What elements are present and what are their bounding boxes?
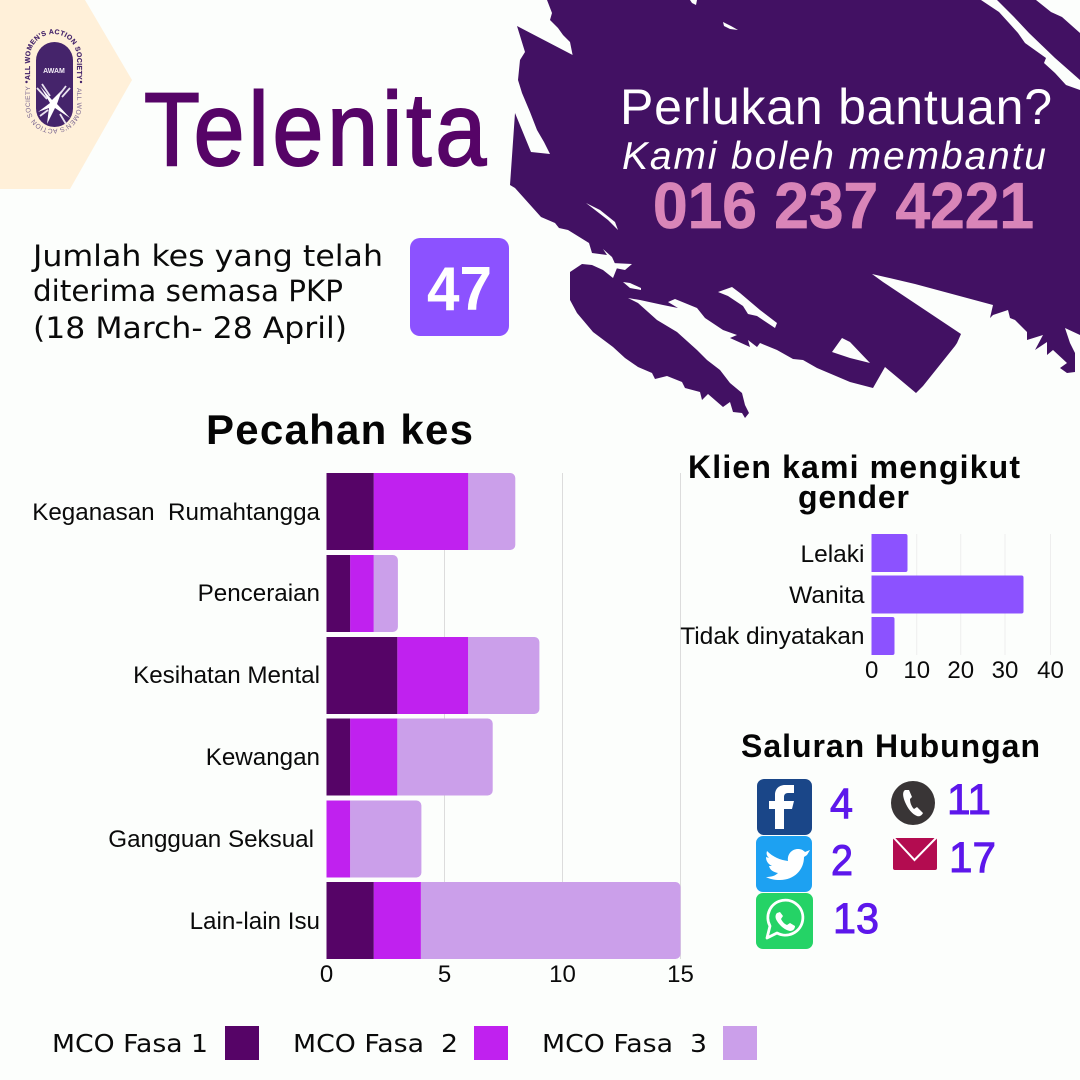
legend item: MCO Fasa 1: [52, 1026, 259, 1060]
legend item: MCO Fasa 2: [293, 1026, 508, 1060]
category labels: Gangguan Seksual: [108, 826, 314, 853]
x axis labels: 20: [947, 657, 974, 684]
category labels: Lain-lain Isu: [190, 908, 320, 935]
x axis labels: 40: [1037, 657, 1064, 684]
stacked bar chart: case breakdown: [32, 473, 694, 988]
heading: clients by gender: [688, 449, 1020, 515]
legend: [52, 1026, 757, 1060]
icon: AWAM logo: ALL WOMEN'S ACTION SOCIETY: [26, 86, 82, 134]
bar: Wanita: [872, 576, 1024, 614]
contact counts: 13: [833, 895, 879, 943]
bars: Kewangan: [326, 718, 493, 796]
title: Telenita: [144, 71, 487, 187]
icon: facebook: [757, 779, 812, 835]
category labels: Kewangan: [206, 744, 320, 771]
heading: clients by gender: Klien kami mengikut: [688, 449, 1020, 485]
category labels: Keganasan Rumahtangga: [32, 499, 321, 526]
icon: whatsapp: [756, 893, 813, 949]
heading: contact channels: Saluran Hubungan: [741, 728, 1040, 764]
contact counts: [830, 776, 996, 943]
bars: Kesihatan Mental: [326, 637, 539, 714]
category labels: Lelaki: [800, 541, 864, 568]
callout: help line: [620, 79, 1052, 242]
heading: clients by gender: gender: [798, 479, 909, 515]
bars: Penceraian: [326, 555, 398, 632]
panel: brush stroke background: [510, 0, 1080, 418]
category labels: Tidak dinyatakan: [680, 623, 864, 650]
x axis labels: 10: [549, 961, 576, 988]
x axis labels: [865, 657, 1064, 684]
contact counts: 11: [947, 776, 991, 824]
icon: mail: [893, 838, 937, 870]
legend item: MCO Fasa 2: MCO Fasa 2: [293, 1029, 458, 1058]
icon: phone: [891, 781, 935, 825]
x axis labels: [320, 961, 694, 988]
icon: AWAM logo: AWAM: [43, 68, 65, 75]
white gaps in the brush: [586, 0, 870, 363]
legend item: MCO Fasa 1: MCO Fasa 1: [52, 1029, 208, 1058]
legend item: MCO Fasa 3: MCO Fasa 3: [542, 1029, 707, 1058]
text block: case total description: diterima semasa PKP: [33, 274, 343, 308]
callout: total cases 47: 47: [427, 255, 492, 324]
x axis labels: 0: [865, 657, 878, 684]
bars: Lain-lain Isu: [326, 882, 680, 959]
category labels: [680, 541, 865, 650]
icon: AWAM logo: [24, 29, 82, 134]
x axis labels: 0: [320, 961, 333, 988]
callout: help line: Perlukan bantuan?: [620, 79, 1052, 135]
bars: Keganasan Rumahtangga: [326, 473, 515, 550]
x axis labels: 10: [903, 657, 930, 684]
heading: case breakdown: Pecahan kes: [206, 406, 473, 453]
text block: case total description: Jumlah kes yang telah: [31, 239, 383, 273]
x axis labels: 30: [992, 657, 1018, 684]
bars: Gangguan Seksual: [326, 800, 421, 878]
category labels: [32, 499, 321, 935]
icon: twitter: [756, 836, 812, 892]
contact counts: 4: [830, 780, 853, 828]
text block: case total description: [31, 239, 383, 345]
category labels: Wanita: [789, 582, 865, 609]
x axis labels: 15: [667, 961, 694, 988]
contact counts: 2: [831, 837, 853, 885]
callout: help line: Kami boleh membantu: [622, 135, 1046, 178]
contact counts: 17: [949, 834, 996, 882]
x axis labels: 5: [438, 961, 451, 988]
callout: help line: 016 237 4221: [653, 169, 1034, 242]
legend item: MCO Fasa 3: [542, 1026, 757, 1060]
bar: Lelaki: [872, 534, 908, 572]
icon: AWAM logo: ALL WOMEN'S ACTION SOCIETY: [24, 29, 82, 80]
text block: case total description: (18 March- 28 April): [33, 311, 347, 345]
category labels: Penceraian: [198, 580, 320, 607]
callout: total cases 47: [410, 238, 509, 336]
bar: Tidak dinyatakan: [872, 617, 894, 655]
panel: logo tab: [0, 0, 132, 189]
category labels: Kesihatan Mental: [133, 662, 320, 689]
bar chart: clients by gender: [680, 534, 1064, 684]
